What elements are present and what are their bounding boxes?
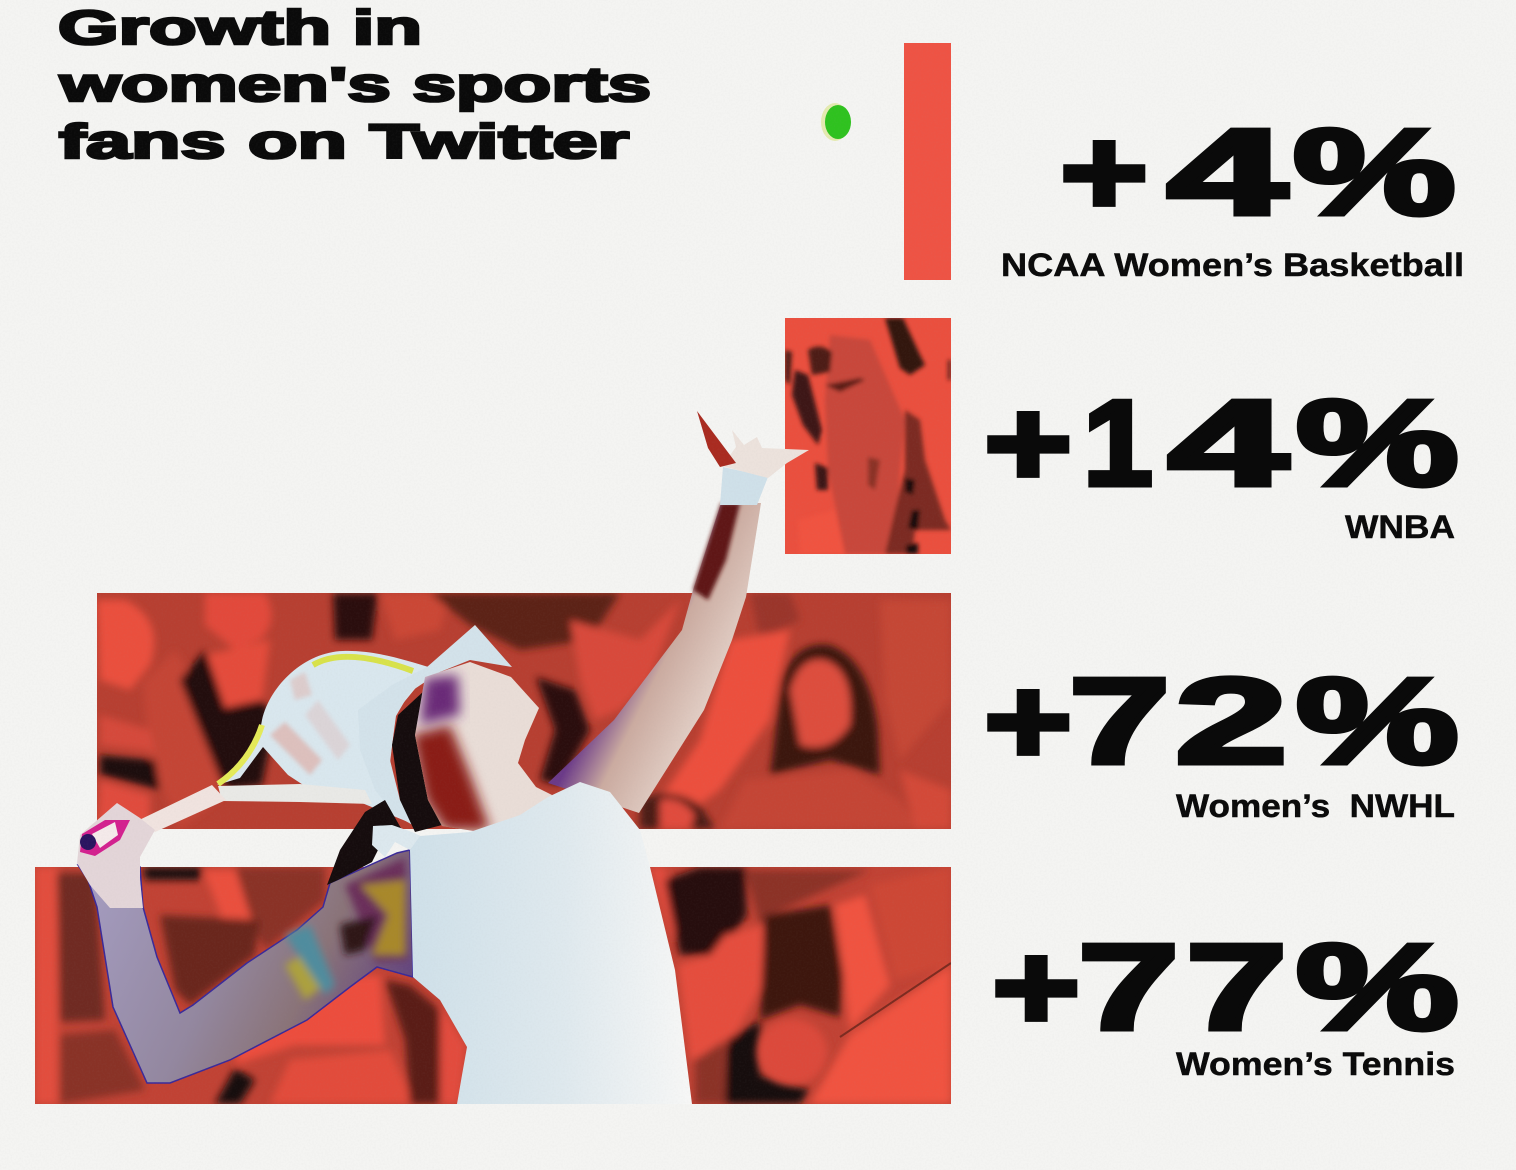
racket grip xyxy=(135,785,226,832)
stat value: +77%: + xyxy=(992,919,1080,1055)
bar: NCAA Women's Basketball +4% xyxy=(904,43,951,280)
stat value: +72%: 7 xyxy=(1069,653,1170,789)
grip end xyxy=(80,820,130,856)
stat value: +72%: % xyxy=(1296,653,1458,789)
hair bow xyxy=(372,825,425,857)
title: women's sports xyxy=(58,59,651,112)
upper arm and forearm xyxy=(78,850,413,1083)
visor xyxy=(358,625,512,828)
stat value: +14%: 4 xyxy=(1168,375,1288,511)
bar: Women's NWHL +72% xyxy=(97,593,951,829)
face and neck xyxy=(412,662,552,832)
stat value: +77%: 7 xyxy=(1078,919,1179,1055)
raised hand xyxy=(697,411,809,478)
title: Growth in xyxy=(58,2,422,55)
stat value: +72%: 2 xyxy=(1175,653,1287,789)
tennis player cutout xyxy=(77,411,809,1104)
raised arm xyxy=(548,503,761,813)
label: NCAA Women's Basketball: NCAA Women’s Basketball xyxy=(1001,247,1464,283)
stat value: +4%: 4 xyxy=(1167,104,1287,240)
stat value: +4% xyxy=(1060,104,1455,240)
stat value: +4%: % xyxy=(1293,104,1455,240)
icon: tennis ball xyxy=(821,103,851,141)
stat value: +77% xyxy=(992,919,1458,1055)
title xyxy=(58,2,651,169)
stat value: +77%: 7 xyxy=(1186,919,1287,1055)
stat value: +14%: 1 xyxy=(1083,375,1152,511)
stat value: +14%: % xyxy=(1296,375,1458,511)
hand on grip xyxy=(77,803,155,908)
racket head xyxy=(217,651,432,822)
stat value: +72%: + xyxy=(984,653,1072,789)
stat value: +4%: + xyxy=(1060,104,1148,240)
racket shaft xyxy=(218,784,372,804)
wristband xyxy=(720,467,768,505)
title: fans on Twitter xyxy=(59,116,629,169)
label: Women's Tennis: Women’s Tennis xyxy=(1176,1046,1455,1082)
stat value: +14% xyxy=(984,375,1458,511)
white top xyxy=(410,782,692,1104)
label: Women's NWHL: Women’s NWHL xyxy=(1176,788,1455,824)
stat value: +72% xyxy=(984,653,1458,789)
label: WNBA: WNBA xyxy=(1345,509,1455,545)
bar: WNBA +14% xyxy=(785,318,951,554)
shoulder colour patches xyxy=(285,858,408,1000)
bar: Women's Tennis +77% xyxy=(35,867,951,1104)
hair xyxy=(327,690,442,885)
stat value: +77%: % xyxy=(1296,919,1458,1055)
stat value: +14%: + xyxy=(984,375,1072,511)
